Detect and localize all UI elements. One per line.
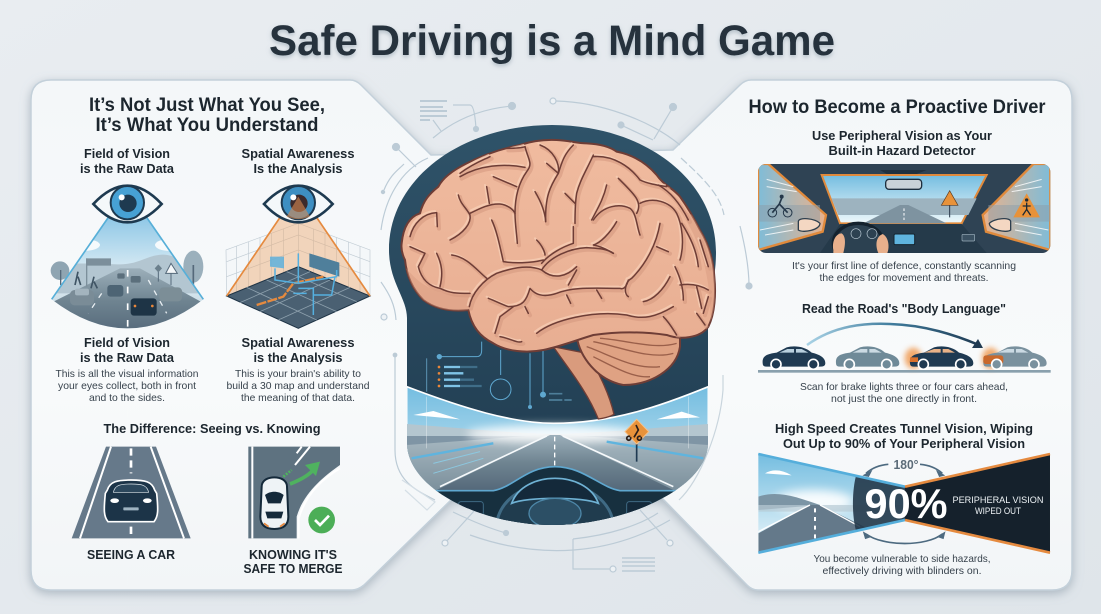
subheading: tunnel vision (775, 421, 1033, 451)
text: brake lights: not just the one directly in front. (831, 393, 977, 405)
illustration: eye with spatial 3D map (226, 186, 370, 328)
text block: field of vision: your eyes collect, both in front (58, 380, 196, 392)
caption: knowing it's safe to merge: KNOWING IT'S (249, 547, 337, 562)
text block: field of vision: This is all the visual information (56, 368, 199, 380)
subheading: field of vision: Field of Vision (84, 146, 170, 161)
text: first line of defence: It's your first line of defence, constantly scanning (792, 260, 1016, 272)
180 degree label: 180° (894, 457, 918, 472)
illustration: driver's view with side windows (758, 164, 1050, 253)
subheading: peripheral vision: Built-in Hazard Detector (828, 143, 976, 158)
brain (401, 140, 720, 419)
subheading: spatial awareness (242, 146, 354, 176)
title: Safe Driving is a Mind Game (269, 17, 835, 65)
text: blinders: effectively driving with blinders on. (822, 565, 982, 577)
caption: knowing it's safe to merge (244, 547, 343, 576)
text block: field of vision: is the Raw Data (80, 350, 175, 365)
subheading: spatial awareness: Is the Analysis (254, 161, 342, 176)
caption: seeing a car: SEEING A CAR (87, 547, 175, 562)
subheading: field of vision (80, 146, 175, 176)
road view with dashboard (407, 386, 708, 525)
right panel heading: How to Become a Proactive Driver (748, 97, 1046, 118)
subheading: tunnel vision: High Speed Creates Tunnel Vision, Wiping (775, 421, 1033, 436)
cerebral cortex with folds (401, 140, 720, 352)
icon: merge road with car and green check (248, 447, 340, 538)
panel backdrop: left and right panels joined around the centre (31, 80, 1072, 590)
subheading: peripheral vision: Use Peripheral Vision as Your (812, 128, 992, 143)
icon: road with car seen from the front (72, 447, 191, 538)
text: first line of defence: the edges for movement and threats. (820, 272, 988, 284)
graphic: tunnel vision 90 percent (758, 453, 1050, 557)
left panel: not just what you see (43, 95, 370, 576)
text: first line of defence (792, 260, 1016, 284)
illustration: eye with field of vision road scene (43, 186, 210, 333)
text block: spatial awareness: is the Analysis (254, 350, 342, 365)
text block: field of vision: and to the sides. (89, 392, 165, 404)
text block: spatial awareness (226, 335, 370, 404)
caption: knowing it's safe to merge: SAFE TO MERGE (244, 561, 343, 576)
centre illustration: brain above road view (389, 125, 716, 525)
text: blinders: You become vulnerable to side hazards, (814, 553, 990, 565)
left panel heading: It’s What You Understand (96, 115, 318, 136)
label: peripheral vision wiped out: PERIPHERAL VISION (952, 495, 1044, 505)
text: brake lights: Scan for brake lights three or four cars ahead, (800, 381, 1008, 393)
text block: field of vision: Field of Vision (84, 335, 170, 350)
heading: the difference: The Difference: Seeing vs. Knowing (104, 421, 320, 436)
cerebellum (577, 330, 680, 385)
digital HUD on dark backdrop (427, 342, 572, 409)
brain stem (553, 347, 614, 419)
label: peripheral vision wiped out (952, 495, 1044, 516)
icon: orange warning sign (625, 419, 649, 462)
arrow: scanning ahead arc (807, 324, 983, 348)
text block: spatial awareness: build a 30 map and understand (226, 380, 370, 392)
90 percent stat: 90% (864, 480, 948, 527)
text block: spatial awareness: This is your brain's ability to (235, 368, 361, 380)
right panel: how to become a proactive driver (748, 97, 1051, 577)
text block: field of vision (56, 335, 199, 404)
subheading: peripheral vision (812, 128, 992, 158)
subheading: body language: Read the Road's "Body Language" (802, 301, 1006, 316)
label: peripheral vision wiped out: WIPED OUT (975, 506, 1021, 516)
left panel heading (89, 95, 325, 136)
text block: spatial awareness: Spatial Awareness (242, 335, 354, 350)
left panel heading: It’s Not Just What You See, (89, 95, 325, 116)
subheading: field of vision: is the Raw Data (80, 161, 175, 176)
text: blinders (814, 553, 990, 577)
subheading: spatial awareness: Spatial Awareness (242, 146, 354, 161)
text block: spatial awareness: the meaning of that data. (241, 392, 355, 404)
text: brake lights (800, 381, 1008, 405)
row of cars with brake lights (758, 346, 1051, 373)
subheading: tunnel vision: Out Up to 90% of Your Peripheral Vision (783, 436, 1025, 451)
circuit decorations around the brain (381, 98, 752, 572)
